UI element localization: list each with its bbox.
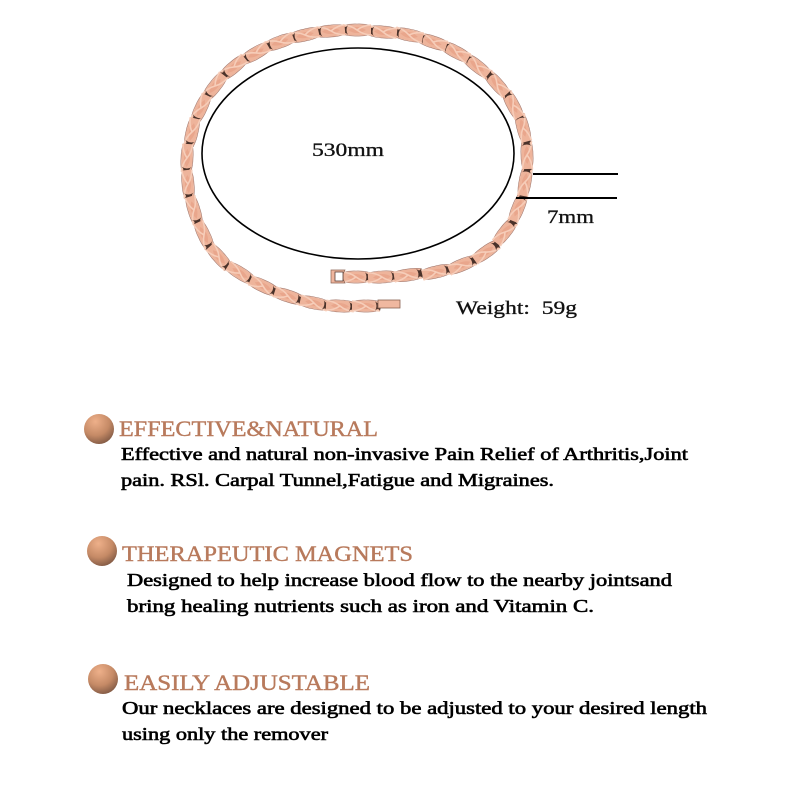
heading: THERAPEUTIC MAGNETS — [122, 541, 413, 566]
body text: using only the remover — [122, 724, 328, 744]
diameter label: 530mm — [312, 140, 384, 161]
weight label: Weight: 59g — [456, 298, 578, 319]
section: effective and natural — [84, 414, 688, 490]
body text — [122, 698, 707, 744]
width label: 7mm — [547, 207, 594, 228]
heading: EASILY ADJUSTABLE — [124, 670, 370, 695]
section: therapeutic magnets — [87, 536, 672, 616]
body text — [121, 444, 688, 490]
body text: Designed to help increase blood flow to the nearby jointsand — [127, 570, 672, 590]
heading: EFFECTIVE&NATURAL — [119, 416, 378, 441]
width marker lines — [516, 174, 618, 198]
inner ellipse — [202, 48, 514, 259]
body text: bring healing nutrients such as iron and Vitamin C. — [127, 596, 594, 616]
section: easily adjustable — [88, 664, 707, 744]
body text — [127, 570, 672, 616]
necklace — [180, 24, 534, 313]
icon: copper ball — [87, 536, 117, 566]
icon: copper ball — [84, 414, 114, 444]
icon: copper ball — [88, 664, 118, 694]
body text: Our necklaces are designed to be adjusted to your desired length — [122, 698, 707, 718]
body text: pain. RSl. Carpal Tunnel,Fatigue and Migraines. — [121, 470, 554, 490]
body text: Effective and natural non-invasive Pain Relief of Arthritis,Joint — [121, 444, 688, 464]
